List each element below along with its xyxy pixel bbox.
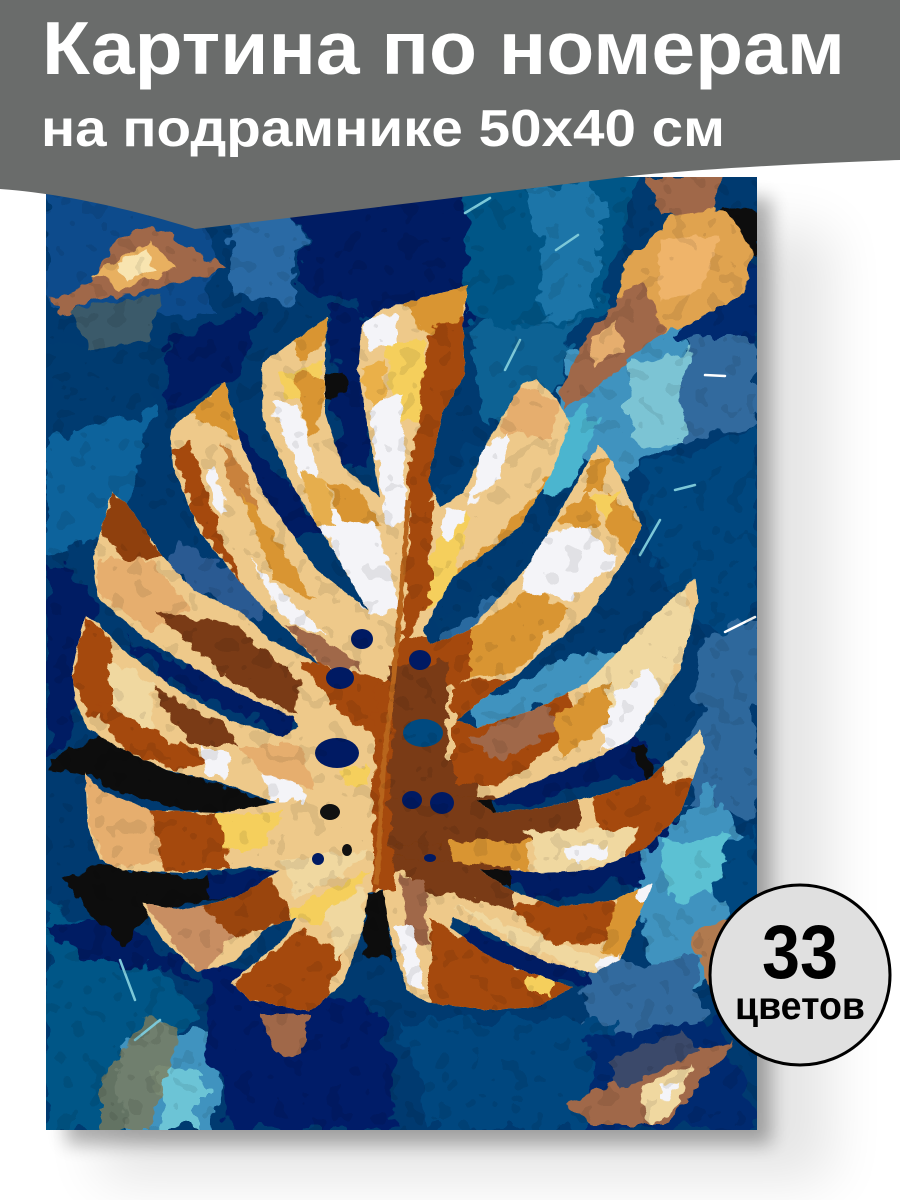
subtitle: на подрамнике 50x40 см: [41, 100, 725, 158]
midrib: [376, 500, 408, 885]
monstera leaf: [60, 280, 720, 1020]
dark gaps: [50, 205, 757, 960]
badge number: 33: [762, 910, 838, 995]
cyan streaks: [120, 198, 755, 1040]
gold paint patches: [50, 177, 752, 1130]
canvas shadow: [66, 198, 830, 1180]
painting background: [46, 170, 757, 1130]
title: Картина по номерам: [42, 6, 845, 90]
paint texture: [46, 177, 757, 1130]
header banner: [0, 0, 900, 229]
leaf colour patches: [72, 280, 710, 1015]
badge label: цветов: [735, 985, 865, 1028]
blue paint patches: [46, 170, 757, 1130]
leaf body: [60, 280, 720, 1020]
leaf holes: [312, 629, 454, 865]
badge: 33 colours: [710, 885, 890, 1065]
